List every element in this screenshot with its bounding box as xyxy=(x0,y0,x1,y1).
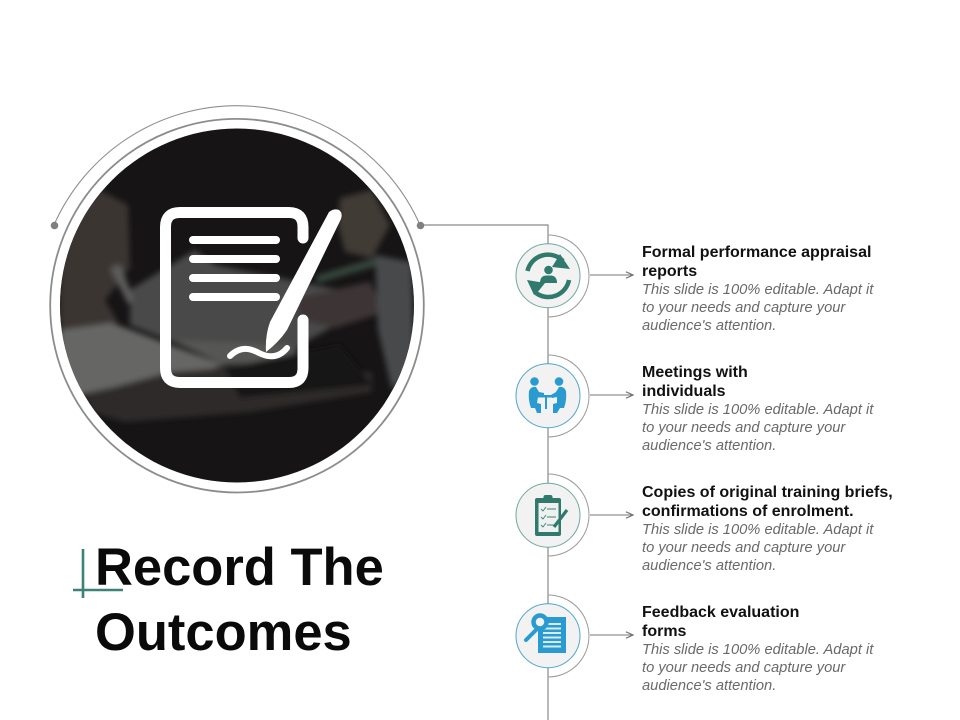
text block 4: Feedback evaluation xyxy=(642,604,799,621)
text block 3: audience's attention. xyxy=(642,558,776,574)
text block 2: individuals xyxy=(642,383,726,400)
text block 2 xyxy=(642,364,874,454)
text block 3 xyxy=(642,484,893,574)
text block 2: to your needs and capture your xyxy=(642,420,845,436)
text block 1: Formal performance appraisal xyxy=(642,244,871,261)
title: Outcomes xyxy=(95,603,352,662)
arrow 2 xyxy=(590,394,633,396)
outer arc with end dots xyxy=(51,106,424,229)
text block 2: Meetings with xyxy=(642,364,748,381)
text block 3: to your needs and capture your xyxy=(642,540,845,556)
arrow 3 xyxy=(590,514,633,516)
text block 1: reports xyxy=(642,263,697,280)
step 4 marker: magnifier over form icon xyxy=(516,595,589,677)
title accent cross xyxy=(73,549,123,598)
text block 4 xyxy=(642,604,874,694)
step 2 marker: two people at a table icon xyxy=(516,355,589,437)
arrow 4 xyxy=(590,634,633,636)
text block 1: to your needs and capture your xyxy=(642,300,845,316)
text block 4: forms xyxy=(642,623,686,640)
text block 3: confirmations of enrolment. xyxy=(642,503,854,520)
text block 3: This slide is 100% editable. Adapt it xyxy=(642,522,873,538)
text block 4: This slide is 100% editable. Adapt it xyxy=(642,642,873,658)
step 3 marker: clipboard checklist icon xyxy=(516,474,589,556)
arrow 1 xyxy=(590,274,633,276)
text block 2: audience's attention. xyxy=(642,438,776,454)
text block 4: audience's attention. xyxy=(642,678,776,694)
text block 1 xyxy=(642,244,874,334)
text block 4: to your needs and capture your xyxy=(642,660,845,676)
photo: hand writing in notebook xyxy=(60,128,414,482)
text block 2: This slide is 100% editable. Adapt it xyxy=(642,402,873,418)
title: Record The xyxy=(95,538,384,597)
step 1 marker: rotating person icon xyxy=(516,235,589,317)
text block 1: This slide is 100% editable. Adapt it xyxy=(642,282,873,298)
title xyxy=(95,538,384,662)
text block 1: audience's attention. xyxy=(642,318,776,334)
connector line from main circle to timeline xyxy=(420,225,548,720)
text block 3: Copies of original training briefs, xyxy=(642,484,893,501)
icon: document with pen signature xyxy=(166,209,342,382)
inner ring xyxy=(50,119,424,492)
